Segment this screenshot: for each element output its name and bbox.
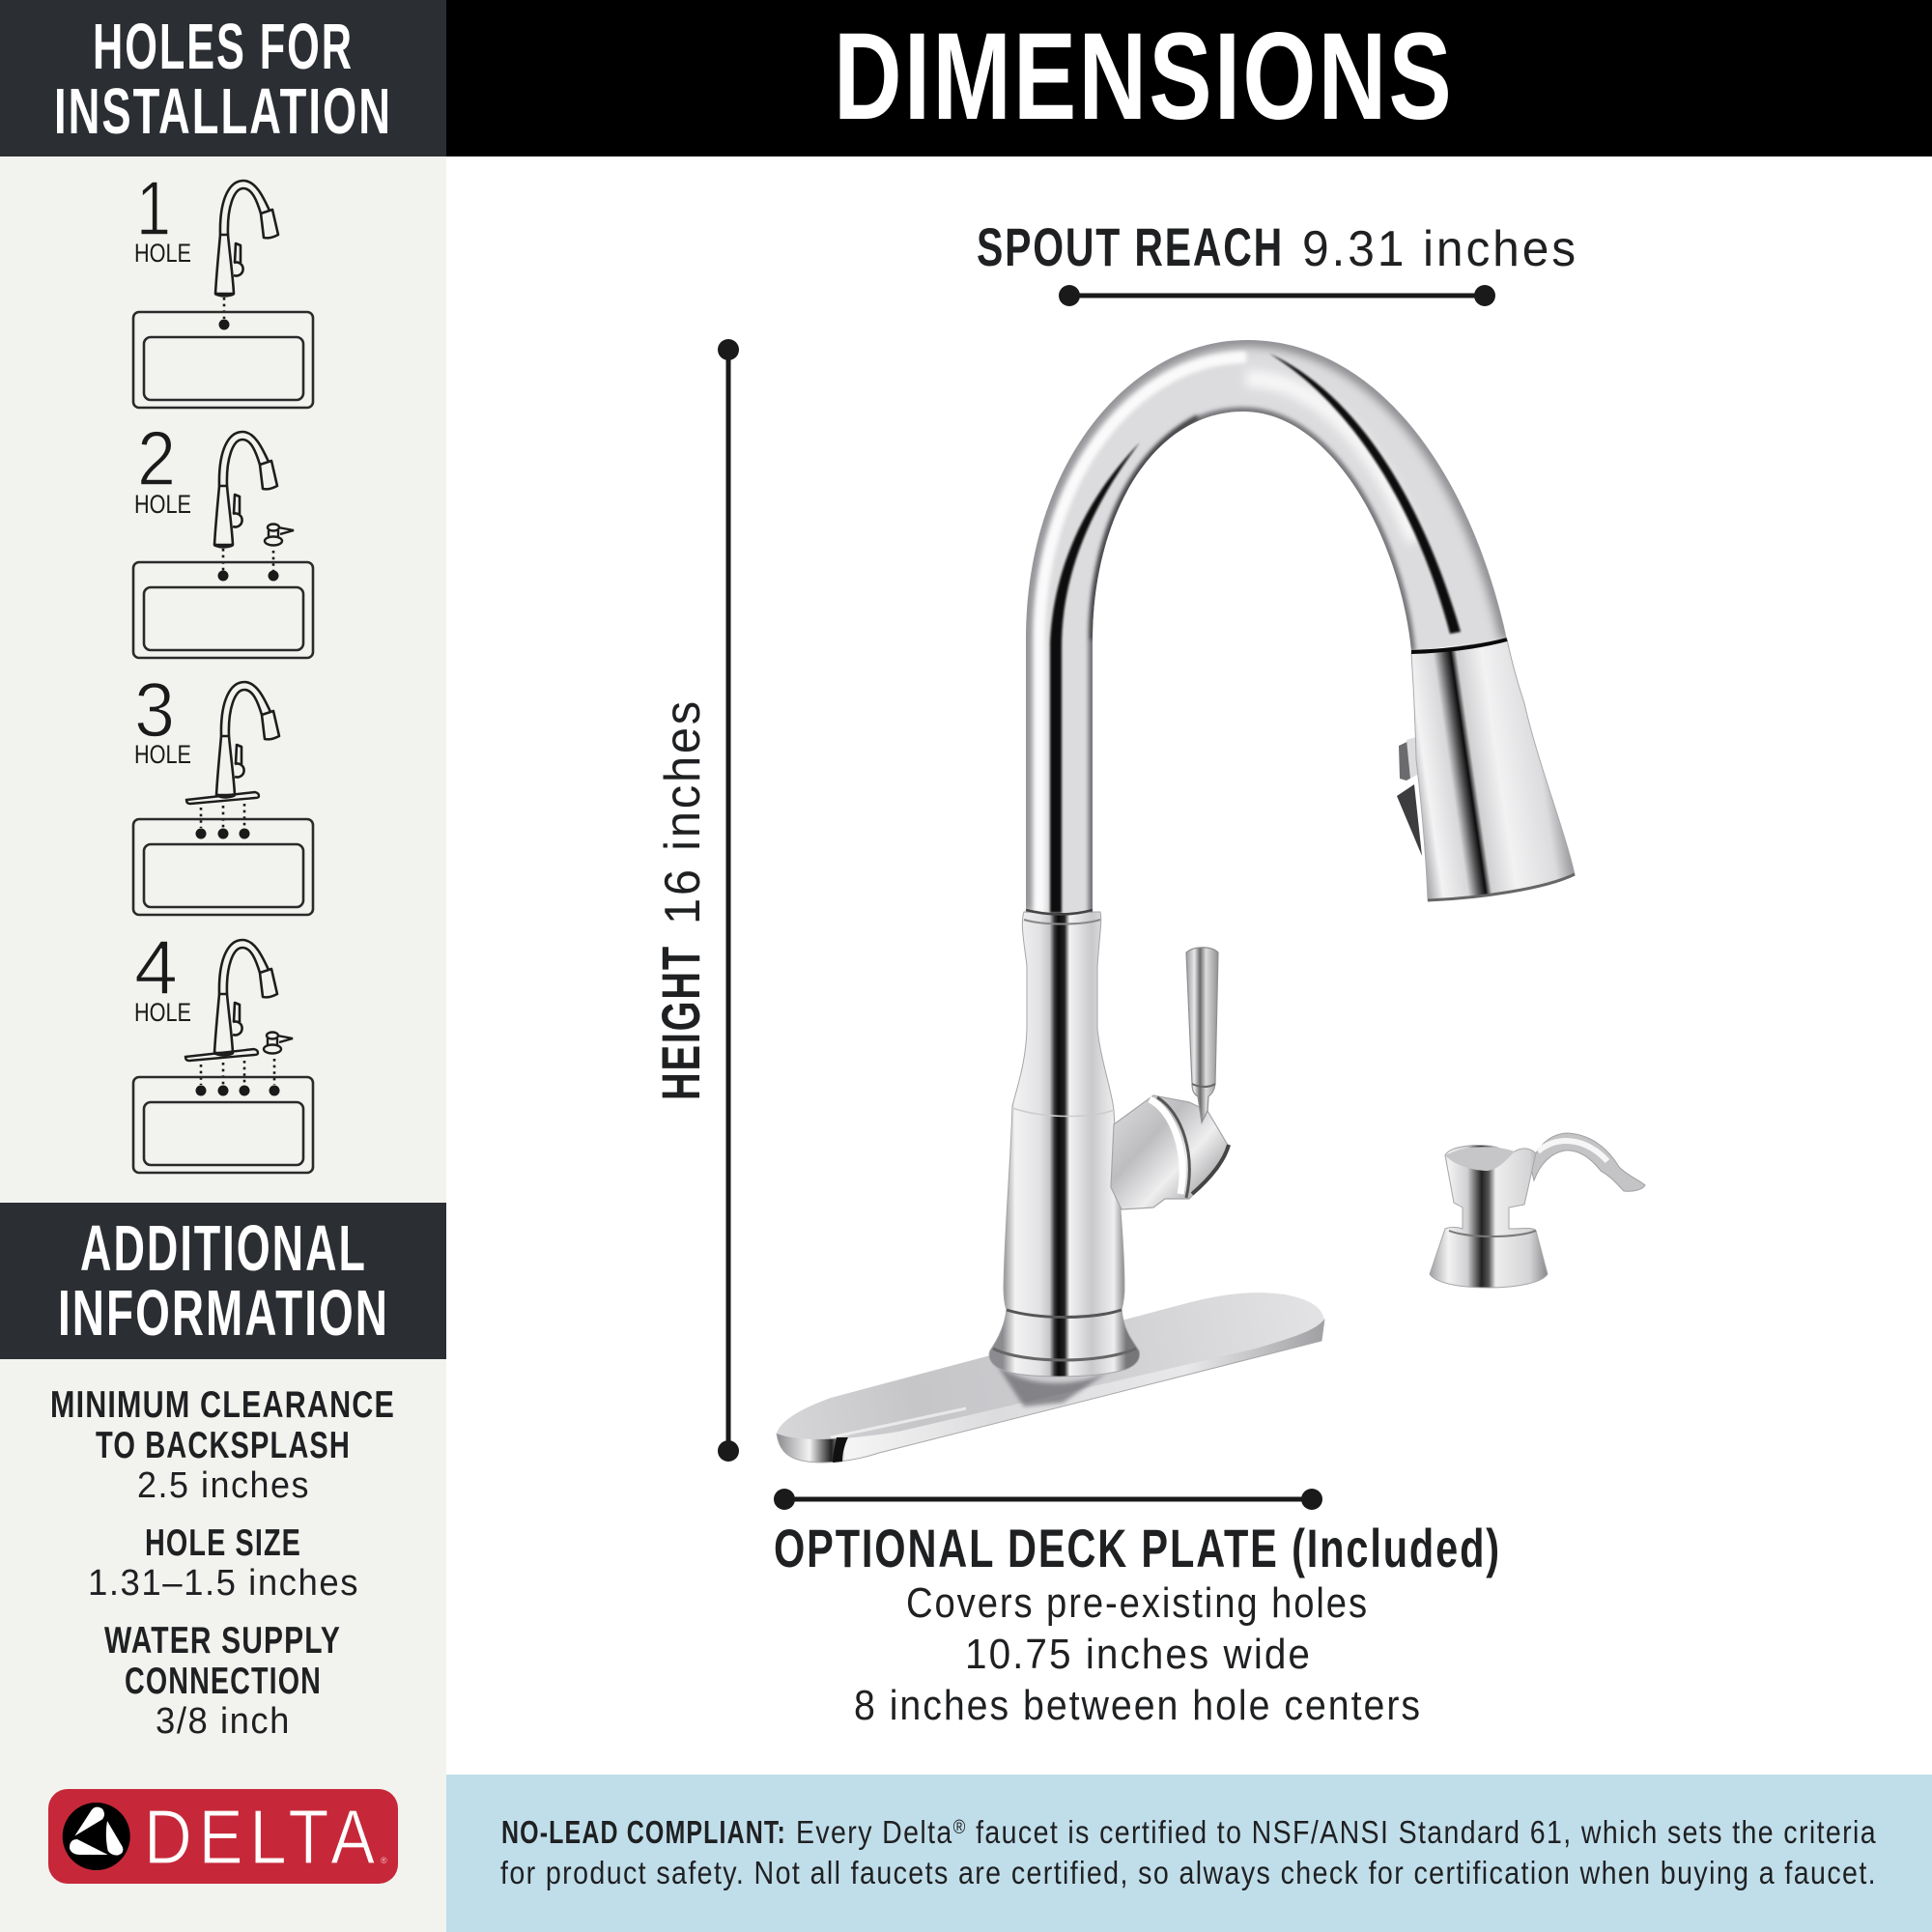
icon: 3 hole installation	[133, 667, 313, 915]
text block: water supply connection	[104, 1620, 341, 1742]
text block: optional deck plate: OPTIONAL DECK PLATE (Included)	[774, 1518, 1501, 1578]
icon: 2 hole installation: 2	[137, 415, 176, 501]
spray head	[1411, 639, 1575, 900]
icon: 2 hole installation: HOLE	[134, 490, 191, 519]
spout	[1014, 328, 1517, 918]
text block: optional deck plate: Covers pre-existing holes	[906, 1579, 1369, 1627]
label: spout reach: SPOUT REACH	[977, 216, 1284, 277]
deck plate	[777, 1293, 1324, 1463]
heading: additional information: INFORMATION	[58, 1277, 389, 1350]
heading: holes for installation	[0, 0, 446, 156]
arrow: deck plate dimension	[774, 1489, 1322, 1510]
text block: minimum clearance: 2.5 inches	[137, 1465, 310, 1506]
icon: 4 hole installation	[133, 924, 313, 1173]
label: height: 16 inches	[655, 698, 711, 924]
panel: no-lead compliant note	[446, 1775, 1932, 1932]
label: height	[650, 698, 711, 1100]
heading: additional information	[0, 1203, 446, 1359]
heading: holes for installation: HOLES FOR	[93, 11, 354, 83]
label: spout reach	[977, 216, 1578, 277]
panel: no-lead compliant note: ®	[953, 1817, 967, 1838]
text block: hole size	[88, 1522, 359, 1604]
handle hub	[1111, 1095, 1229, 1209]
text block: minimum clearance	[50, 1384, 395, 1506]
icon: 1 hole installation: HOLE	[134, 239, 191, 268]
arrow: height dimension	[718, 339, 739, 1462]
text block: water supply connection: 3/8 inch	[156, 1701, 291, 1742]
text block: optional deck plate: 8 inches between hole centers	[854, 1682, 1422, 1729]
text block: minimum clearance: TO BACKSPLASH	[96, 1425, 351, 1466]
title banner: dimensions	[446, 0, 1932, 156]
spray trigger	[1397, 736, 1422, 856]
panel: sidebar	[0, 0, 446, 1932]
text block: water supply connection: WATER SUPPLY	[104, 1620, 341, 1662]
text block: hole size: HOLE SIZE	[145, 1522, 301, 1564]
product image: kitchen faucet	[777, 328, 1575, 1463]
logo: delta	[48, 1789, 398, 1884]
panel: no-lead compliant note: NO-LEAD COMPLIANT:	[501, 1814, 786, 1850]
icon: 3 hole installation: HOLE	[134, 740, 191, 769]
heading: holes for installation: INSTALLATION	[54, 75, 392, 148]
icon: 3 hole installation: 3	[134, 667, 175, 753]
text block: optional deck plate: 10.75 inches wide	[965, 1631, 1312, 1678]
text block: water supply connection: CONNECTION	[125, 1661, 322, 1702]
heading: additional information: ADDITIONAL	[80, 1212, 367, 1285]
text block: optional deck plate	[774, 1518, 1501, 1729]
icon: 4 hole installation: 4	[134, 924, 178, 1010]
text block: hole size: 1.31–1.5 inches	[88, 1563, 359, 1604]
faucet body	[989, 912, 1140, 1377]
panel: no-lead compliant note: Every Delta	[796, 1814, 978, 1850]
logo: delta: ®	[381, 1856, 387, 1865]
icon: 4 hole installation: HOLE	[134, 998, 191, 1027]
icon: 1 hole installation: 1	[136, 165, 171, 251]
handle lever	[1186, 948, 1218, 1122]
arrow: spout reach dimension	[1059, 285, 1495, 306]
icon: 2 hole installation	[133, 415, 313, 658]
icon: 1 hole installation	[133, 165, 313, 408]
text block: minimum clearance: MINIMUM CLEARANCE	[50, 1384, 395, 1426]
product image: soap dispenser	[1430, 1133, 1645, 1288]
label: spout reach: 9.31 inches	[1302, 221, 1578, 277]
logo: delta: DELTA	[144, 1794, 382, 1880]
label: height: HEIGHT	[650, 945, 711, 1100]
title banner: dimensions: DIMENSIONS	[834, 8, 1454, 146]
